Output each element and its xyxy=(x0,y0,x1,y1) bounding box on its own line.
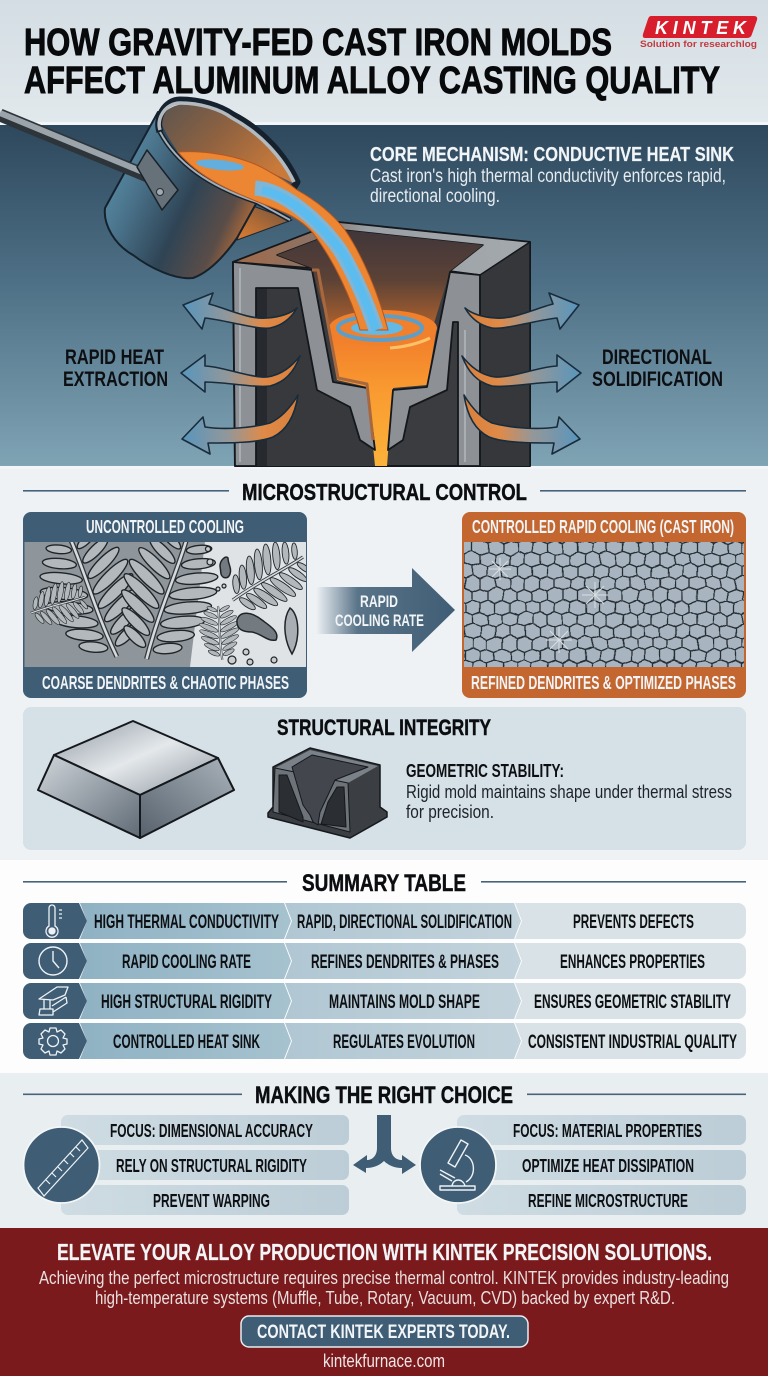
label: rapid heat extraction: RAPID HEAT xyxy=(65,346,164,369)
heading: making the right choice: MAKING THE RIGHT CHOICE xyxy=(255,1082,513,1109)
table row: structural rigidity: MAINTAINS MOLD SHAPE xyxy=(329,992,480,1013)
table row: thermal conductivity: RAPID, DIRECTIONAL SOLIDIFICATION xyxy=(297,912,512,933)
list: dimensional accuracy xyxy=(24,1115,349,1215)
label: directional solidification: SOLIDIFICATION xyxy=(592,368,723,391)
illustration: mold miniature xyxy=(268,748,387,838)
panel: uncontrolled cooling: COARSE DENDRITES & CHAOTIC PHASES xyxy=(42,673,289,693)
illustration: aluminum ingot xyxy=(38,721,234,838)
panel: structural integrity xyxy=(23,707,746,850)
heading: microstructural control: MICROSTRUCTURAL CONTROL xyxy=(242,479,527,505)
title xyxy=(24,22,720,102)
list: dimensional accuracy: FOCUS: DIMENSIONAL ACCURACY xyxy=(110,1120,313,1141)
icon: thermometer xyxy=(46,905,62,937)
table row: structural rigidity xyxy=(23,983,746,1019)
section background: making the right choice xyxy=(0,1073,768,1228)
label: directional solidification: DIRECTIONAL xyxy=(602,346,712,369)
list: material properties xyxy=(420,1115,746,1215)
illustration: pouring stream xyxy=(178,152,388,330)
logo: KINTEK xyxy=(640,16,757,50)
table row: heat sink xyxy=(23,1023,746,1059)
list: dimensional accuracy: PREVENT WARPING xyxy=(153,1190,270,1211)
text: core mechanism: directional cooling. xyxy=(370,186,500,207)
arrow: rapid cooling rate xyxy=(316,568,455,652)
table row: thermal conductivity xyxy=(23,903,746,939)
table row: cooling rate xyxy=(23,943,746,979)
micrograph: refined cells xyxy=(460,538,750,671)
logo: KINTEK: Solution for researchlog xyxy=(640,39,757,50)
text: geometric stability: GEOMETRIC STABILITY: xyxy=(406,760,564,781)
illustration: cast iron mold xyxy=(233,222,530,466)
panel: controlled rapid cooling xyxy=(460,512,750,698)
logo: KINTEK: KINTEK xyxy=(655,18,748,38)
table row: thermal conductivity: HIGH THERMAL CONDUCTIVITY xyxy=(94,912,279,933)
micrograph: coarse dendrites xyxy=(24,542,306,667)
title: HOW GRAVITY-FED CAST IRON MOLDS xyxy=(24,22,612,64)
panel: uncontrolled cooling: UNCONTROLLED COOLING xyxy=(86,517,244,537)
heading: summary table: SUMMARY TABLE xyxy=(302,870,466,897)
panel: structural integrity: STRUCTURAL INTEGRITY xyxy=(277,715,491,740)
section background: microstructure xyxy=(0,469,768,860)
label: rapid heat extraction xyxy=(63,346,168,391)
text: geometric stability xyxy=(406,760,732,822)
table row: thermal conductivity: PREVENTS DEFECTS xyxy=(573,912,694,933)
list: dimensional accuracy: RELY ON STRUCTURAL RIGIDITY xyxy=(116,1155,307,1176)
text: core mechanism xyxy=(370,144,734,207)
icon: gear xyxy=(39,1028,67,1055)
header background xyxy=(0,0,768,123)
arrows: heat flow left xyxy=(181,293,300,454)
section background: summary table xyxy=(0,860,768,1073)
table row: heat sink: REGULATES EVOLUTION xyxy=(333,1032,475,1053)
table row: heat sink: CONTROLLED HEAT SINK xyxy=(113,1032,260,1053)
panel: call to action footer: kintekfurnace.com xyxy=(323,1351,445,1371)
arrow: rapid cooling rate: COOLING RATE xyxy=(335,611,424,630)
table row: cooling rate: RAPID COOLING RATE xyxy=(122,952,251,973)
panel: uncontrolled cooling xyxy=(23,512,320,698)
text: geometric stability: for precision. xyxy=(406,801,494,822)
button: contact: CONTACT KINTEK EXPERTS TODAY. xyxy=(257,1321,510,1343)
panel: core mechanism hero xyxy=(0,100,768,469)
table row: structural rigidity: HIGH STRUCTURAL RIGIDITY xyxy=(101,992,272,1013)
arrows: heat flow right xyxy=(462,293,581,454)
icon: ruler xyxy=(24,1127,100,1203)
icon: clock xyxy=(39,947,67,975)
button: contact xyxy=(241,1316,528,1347)
illustration: molten metal pool xyxy=(329,310,437,466)
icon: steel beam xyxy=(39,987,68,1015)
arrow: rapid cooling rate: RAPID xyxy=(360,592,398,611)
label: rapid heat extraction: EXTRACTION xyxy=(63,368,168,391)
panel: call to action footer xyxy=(0,1228,768,1376)
arrow: split decision xyxy=(353,1115,416,1174)
label: directional solidification xyxy=(592,346,723,391)
illustration: ladle xyxy=(0,100,297,278)
icon: microscope xyxy=(420,1127,496,1203)
table row: cooling rate: REFINES DENDRITES & PHASES xyxy=(311,952,499,973)
